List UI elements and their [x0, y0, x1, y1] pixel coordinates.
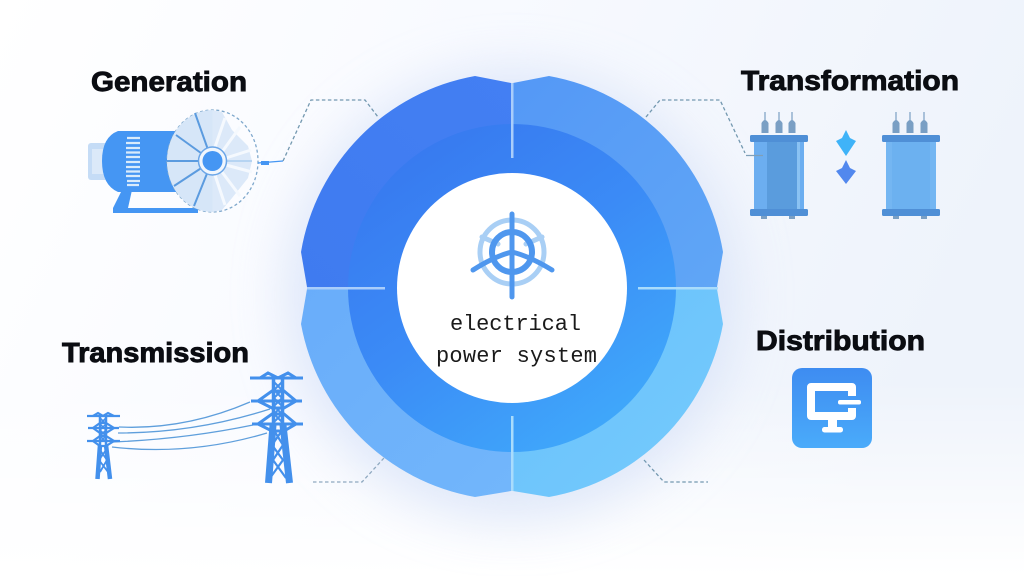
- icon: down arrow cyan: [836, 130, 856, 156]
- segment divider: left: [307, 287, 385, 290]
- segment divider: right: [638, 287, 718, 290]
- heading: Transmission: Transmission: [62, 337, 249, 368]
- center white disc: [397, 173, 627, 403]
- inner ring: [348, 124, 676, 452]
- icon: down arrow blue: [836, 160, 856, 184]
- segment divider: top: [511, 83, 514, 158]
- icon: distribution monitor: [792, 368, 872, 448]
- icon: step-down transformer left: [746, 112, 808, 219]
- large tower: [250, 373, 303, 483]
- outer segment: bottom-left: [301, 289, 511, 497]
- outer segment: bottom-right: [513, 289, 723, 497]
- icon: step-down transformer right: [882, 112, 940, 219]
- center label: power system: [436, 344, 597, 369]
- icon: generator: [88, 110, 283, 213]
- heading: Generation: Generation: [91, 66, 247, 97]
- wires: [112, 402, 270, 450]
- connector: transformation: [646, 100, 745, 153]
- center label: [436, 312, 597, 369]
- icon: power lines: [87, 373, 303, 483]
- center label: electrical: [450, 312, 581, 337]
- connector: distribution: [644, 460, 708, 482]
- heading: Transformation: Transformation: [741, 65, 959, 96]
- outer segment: top-right: [513, 76, 723, 287]
- outer segment: top-left: [301, 76, 511, 287]
- heading: Distribution: Distribution: [756, 325, 925, 356]
- center icon: [473, 214, 552, 297]
- segment divider: bottom: [511, 416, 514, 491]
- central ring diagram: [301, 76, 723, 497]
- small tower: [87, 413, 120, 479]
- connector: transmission: [313, 458, 384, 482]
- connector: generation: [283, 100, 378, 161]
